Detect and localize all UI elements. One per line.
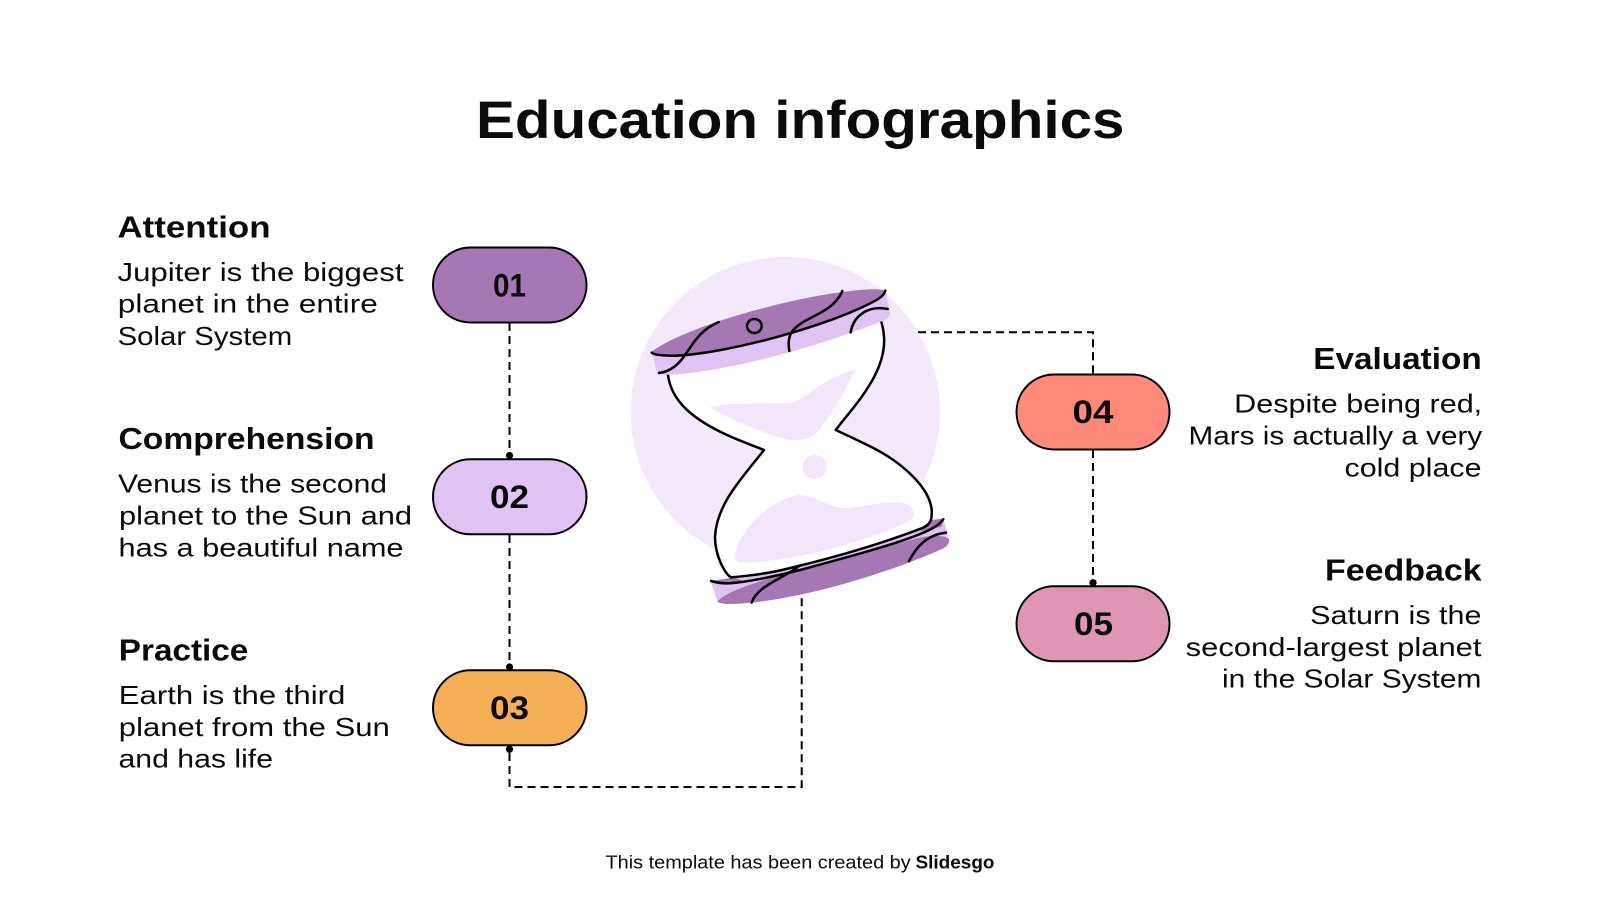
pill 02 xyxy=(433,459,586,534)
text: practice description: and has life xyxy=(118,744,273,774)
bottom base xyxy=(711,518,949,604)
text: comprehension description xyxy=(118,469,412,563)
panel: feedback xyxy=(1186,552,1483,694)
pill 02: 02 xyxy=(490,479,529,515)
footer credit: Slidesgo xyxy=(916,852,995,872)
heading: practice: Practice xyxy=(119,632,248,668)
text: evaluation description: Despite being red, xyxy=(1234,389,1482,419)
title: Education infographics xyxy=(476,91,1124,150)
footer credit: This template has been created by xyxy=(606,852,911,872)
panel: comprehension xyxy=(118,421,412,563)
text: comprehension description: Venus is the second xyxy=(118,469,387,499)
pill 04: 04 xyxy=(1072,394,1114,430)
panel: evaluation xyxy=(1188,341,1482,483)
text: evaluation description: cold place xyxy=(1344,453,1482,483)
pill 03 xyxy=(433,670,586,745)
text: feedback description: Saturn is the xyxy=(1310,600,1482,630)
text: feedback description: second-largest planet xyxy=(1186,632,1482,662)
connector: 03 to hourglass xyxy=(506,593,802,787)
text: feedback description xyxy=(1186,600,1482,694)
pill 01 xyxy=(433,248,586,322)
panel: practice xyxy=(118,632,390,774)
pill 01: 01 xyxy=(493,268,526,304)
heading: comprehension: Comprehension xyxy=(118,421,374,456)
pill 04 xyxy=(1016,374,1170,450)
heading: attention: Attention xyxy=(118,210,270,244)
heading: feedback: Feedback xyxy=(1325,552,1483,588)
panel: attention xyxy=(118,210,404,351)
illustration: hourglass xyxy=(631,257,949,604)
text: comprehension description: has a beautiful name xyxy=(118,533,404,563)
pill 03: 03 xyxy=(490,690,529,726)
pill 05: 05 xyxy=(1074,606,1113,642)
connector: 01 to 02 xyxy=(506,323,513,459)
connector: hourglass to 04 xyxy=(918,332,1093,374)
background circle xyxy=(631,257,940,566)
text: evaluation description xyxy=(1188,389,1482,483)
text: comprehension description: planet to the Sun and xyxy=(119,500,412,530)
text: attention description: Jupiter is the biggest xyxy=(118,257,404,287)
connector: 04 to 05 xyxy=(1089,450,1097,586)
text: practice description xyxy=(118,680,390,774)
heading: evaluation: Evaluation xyxy=(1313,341,1482,376)
text: feedback description: in the Solar System xyxy=(1222,664,1482,694)
text: evaluation description: Mars is actually a very xyxy=(1188,420,1482,450)
text: attention description: planet in the entire xyxy=(118,289,378,319)
sand xyxy=(710,370,914,563)
text: attention description xyxy=(118,257,404,351)
connector: 02 to 03 xyxy=(506,535,513,671)
bottom base lines xyxy=(711,519,946,603)
text: practice description: Earth is the third xyxy=(119,680,345,710)
text: attention description: Solar System xyxy=(118,321,292,351)
glass body xyxy=(668,320,932,577)
text: practice description: planet from the Sun xyxy=(119,712,390,742)
top lid xyxy=(652,289,890,375)
pill 05 xyxy=(1016,586,1170,661)
